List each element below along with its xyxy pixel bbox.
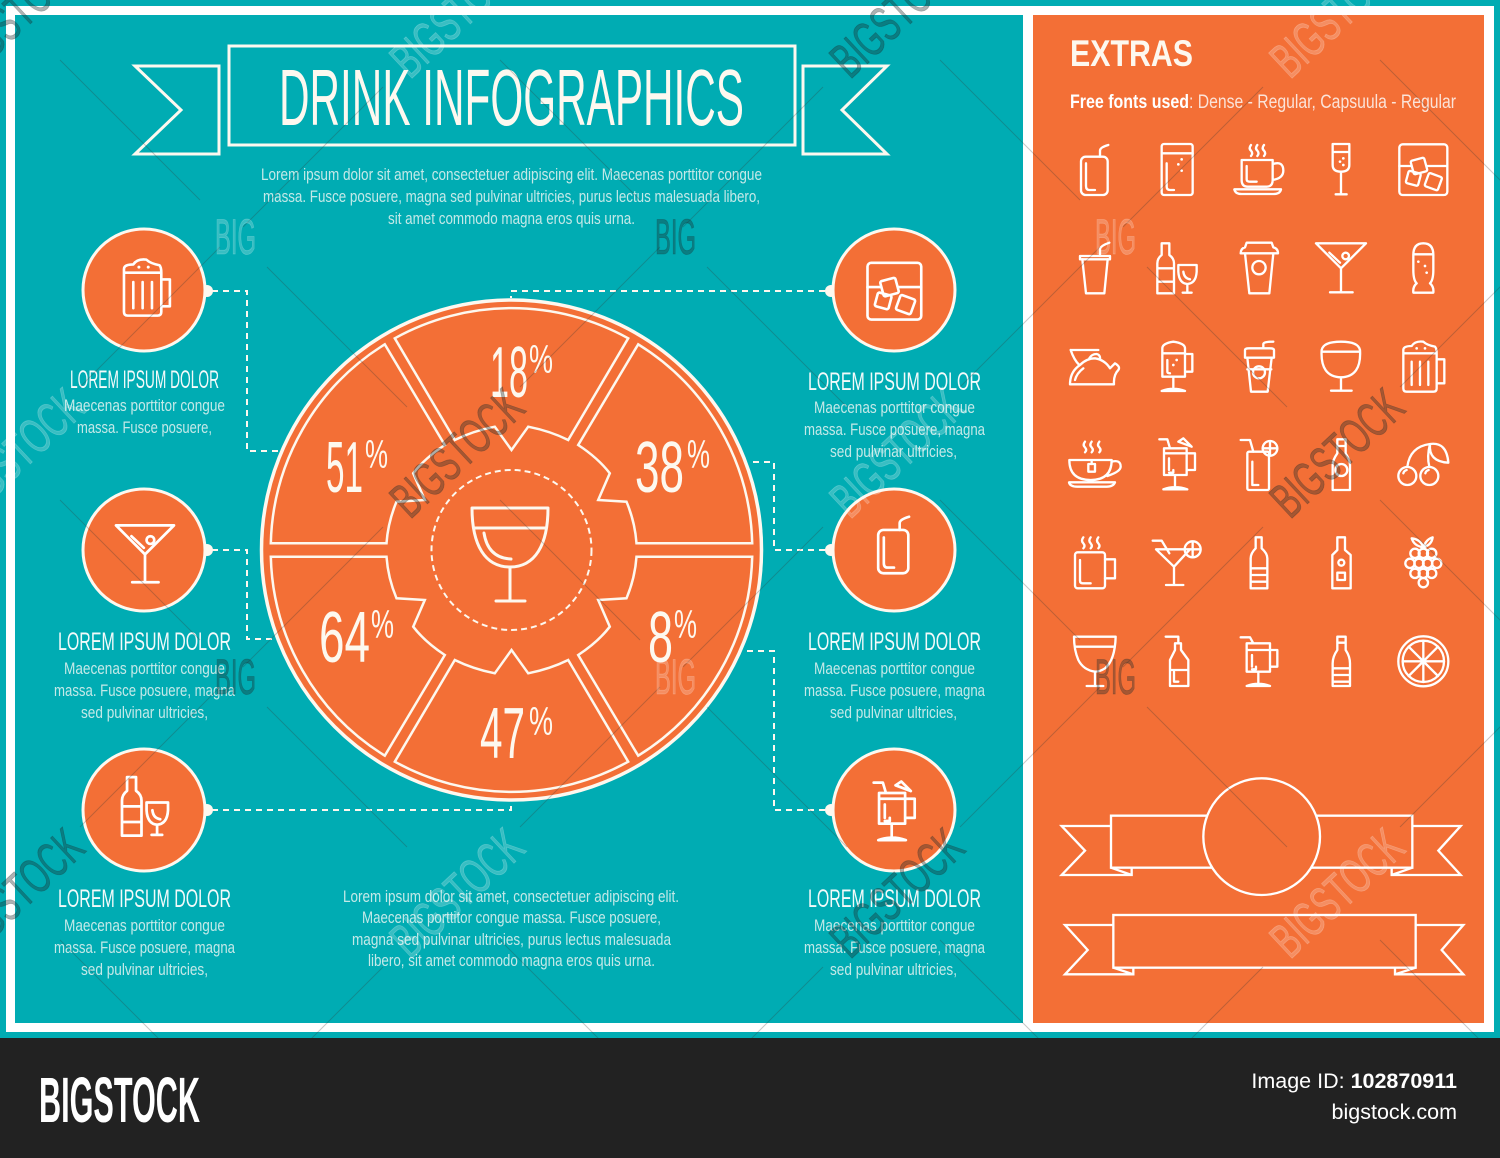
label: beer: LOREM IPSUM DOLOR — [70, 366, 219, 394]
title banner: DRINK INFOGRAPHICS — [279, 53, 744, 142]
icon: coffee to go — [1241, 243, 1278, 293]
footer site: bigstock.com — [1332, 1100, 1457, 1124]
panel: extras orange — [1033, 15, 1484, 1023]
label: martini: LOREM IPSUM DOLOR — [58, 628, 231, 656]
icon: wine glass — [1322, 342, 1360, 391]
icon: can — [878, 517, 909, 573]
bottom text — [343, 887, 679, 970]
watermark text: BIG — [215, 209, 256, 265]
node: bottle — [83, 749, 213, 871]
watermark text: BIGSTOCK — [819, 818, 975, 968]
node: beer — [83, 229, 213, 351]
icon: beer mug — [1403, 342, 1444, 392]
icon: cup with straw — [1080, 243, 1110, 293]
watermark text: BIG — [655, 649, 696, 705]
label: can — [804, 628, 985, 722]
icon: champagne flute — [1333, 144, 1349, 194]
label: mug: sed pulvinar ultricies, — [830, 960, 957, 979]
label: can: sed pulvinar ultricies, — [830, 703, 957, 722]
icon: kettle — [1070, 350, 1119, 384]
watermark text: BIGSTOCK — [1259, 378, 1415, 528]
label: whiskey: massa. Fusce posuere, magna — [804, 420, 985, 439]
label: whiskey: LOREM IPSUM DOLOR — [808, 368, 981, 396]
value 18%: % — [529, 338, 553, 382]
icon: tall drink with lime — [1241, 440, 1277, 490]
icon: glass mug — [1162, 342, 1192, 391]
intro text: sit amet commodo magna eros quis urna. — [388, 209, 635, 228]
label: mug: LOREM IPSUM DOLOR — [808, 885, 981, 913]
watermark text: BIGSTOCK — [379, 378, 535, 528]
value 18%: 18 — [490, 333, 528, 413]
panel: main teal — [15, 15, 1023, 1023]
value 47%: 47 — [480, 694, 525, 774]
text: BIGSTOCK — [39, 1064, 200, 1136]
icon: grapes — [1405, 537, 1441, 587]
icon: coffee cup — [1234, 145, 1283, 194]
value 8%: 8 — [648, 598, 673, 678]
label: bottle: sed pulvinar ultricies, — [81, 960, 208, 979]
icon: centre wine glass — [472, 508, 548, 601]
value 38%: % — [687, 433, 710, 477]
wheel chart — [262, 300, 762, 800]
icon: mug with straw and leaf — [1159, 438, 1195, 489]
value 64%: 64 — [319, 598, 370, 678]
label: martini: massa. Fusce posuere, magna — [54, 681, 235, 700]
icon: bottle and glass — [122, 777, 168, 836]
fonts note — [1070, 92, 1457, 113]
icon: large wine glass — [1074, 637, 1116, 686]
icon: tall beer — [1413, 243, 1433, 293]
value 64%: % — [371, 603, 394, 647]
icon: can — [1081, 145, 1108, 195]
intro text — [261, 165, 762, 228]
label: bottle — [54, 885, 235, 979]
segment 18% — [395, 308, 628, 450]
label: beer: massa. Fusce posuere, — [77, 418, 212, 437]
segment 64% — [271, 557, 445, 756]
label: martini: sed pulvinar ultricies, — [81, 703, 208, 722]
watermark text: BIGSTOCK — [819, 378, 975, 528]
label: bottle: massa. Fusce posuere, magna — [54, 938, 235, 957]
icon: glass — [1162, 144, 1193, 195]
icon: whiskey glass — [1399, 144, 1447, 195]
label: whiskey — [804, 368, 985, 461]
icon: square bottle — [1332, 537, 1351, 588]
ribbon with badge — [1062, 778, 1461, 895]
node: mug — [825, 749, 955, 871]
icon: champagne bottle — [1333, 637, 1350, 686]
label: can: LOREM IPSUM DOLOR — [808, 628, 981, 656]
plain ribbon — [1065, 915, 1463, 974]
dashed hub — [432, 470, 592, 630]
node: can — [825, 489, 955, 611]
segment 51% — [271, 344, 445, 543]
footer bar — [0, 1038, 1500, 1158]
node: martini — [83, 489, 213, 611]
connector lines — [212, 291, 825, 810]
icon: wine bottle — [1333, 439, 1350, 490]
icon: mug with straw — [1241, 637, 1277, 686]
node: whiskey — [825, 229, 955, 351]
icon: orange slice — [1398, 636, 1448, 686]
footer image id: Image ID: 102870911 — [1251, 1069, 1457, 1093]
icon grid — [1069, 144, 1448, 686]
bottom text: magna sed pulvinar ultricies, purus lectus malesuada — [352, 930, 671, 949]
segment 8% — [578, 557, 752, 756]
segment 38% — [578, 344, 752, 543]
watermark text: BIG — [655, 209, 696, 265]
value 47%: % — [529, 700, 553, 744]
title banner — [135, 46, 887, 154]
label: mug — [804, 885, 985, 979]
intro text: Lorem ipsum dolor sit amet, consectetuer adipiscing elit. Maecenas porttitor congue — [261, 165, 762, 184]
watermark text — [0, 0, 1415, 968]
label: can: massa. Fusce posuere, magna — [804, 681, 985, 700]
label: beer: Maecenas porttitor congue — [64, 396, 225, 415]
icon: martini — [1316, 243, 1366, 292]
icon: bottle stripes — [1251, 537, 1267, 588]
value 38%: 38 — [635, 428, 684, 508]
watermark text: BIG — [1095, 649, 1136, 705]
bottom text: Lorem ipsum dolor sit amet, consectetuer adipiscing elit. — [343, 887, 679, 906]
icon: bottle and glass — [1157, 243, 1197, 293]
icon: cherries — [1398, 444, 1448, 485]
label: martini: Maecenas porttitor congue — [64, 659, 225, 678]
bottom text: libero, sit amet commodo magna eros quis urna. — [368, 951, 655, 970]
extras heading: EXTRAS — [1070, 33, 1193, 74]
icon: cocktail with lime — [1153, 541, 1201, 585]
icon: tea cup — [1069, 442, 1121, 487]
segment 47% — [395, 650, 628, 792]
label: can: Maecenas porttitor congue — [814, 659, 975, 678]
label: whiskey: sed pulvinar ultricies, — [830, 442, 957, 461]
label: bottle: Maecenas porttitor congue — [64, 916, 225, 935]
label: martini — [54, 628, 235, 722]
watermark text: BIGSTOCK — [1259, 818, 1415, 968]
icon: martini — [116, 525, 174, 582]
icon: beer — [124, 259, 170, 316]
fonts note: Free fonts used — [1070, 92, 1189, 113]
label: whiskey: Maecenas porttitor congue — [814, 398, 975, 417]
icon: mug with steam — [1075, 537, 1115, 588]
icon: mug with straw — [874, 781, 915, 840]
label: bottle: LOREM IPSUM DOLOR — [58, 885, 231, 913]
value 51%: 51 — [326, 428, 363, 508]
intro text: massa. Fusce posuere, magna sed pulvinar ultricies, purus lectus malesuada libero, — [263, 187, 760, 206]
label: beer — [64, 366, 225, 437]
value 8%: % — [674, 603, 697, 647]
watermark text: BIG — [1095, 209, 1136, 265]
icon: whiskey — [867, 263, 921, 320]
value 51%: % — [365, 433, 388, 477]
icon: takeaway cup — [1245, 342, 1274, 392]
watermark text: BIGSTOCK — [379, 818, 535, 968]
icon: juice bottle — [1166, 637, 1188, 686]
watermark text: BIG — [215, 649, 256, 705]
label: mug: Maecenas porttitor congue — [814, 916, 975, 935]
bottom text: Maecenas porttitor congue massa. Fusce posuere, — [362, 908, 661, 927]
label: mug: massa. Fusce posuere, magna — [804, 938, 985, 957]
